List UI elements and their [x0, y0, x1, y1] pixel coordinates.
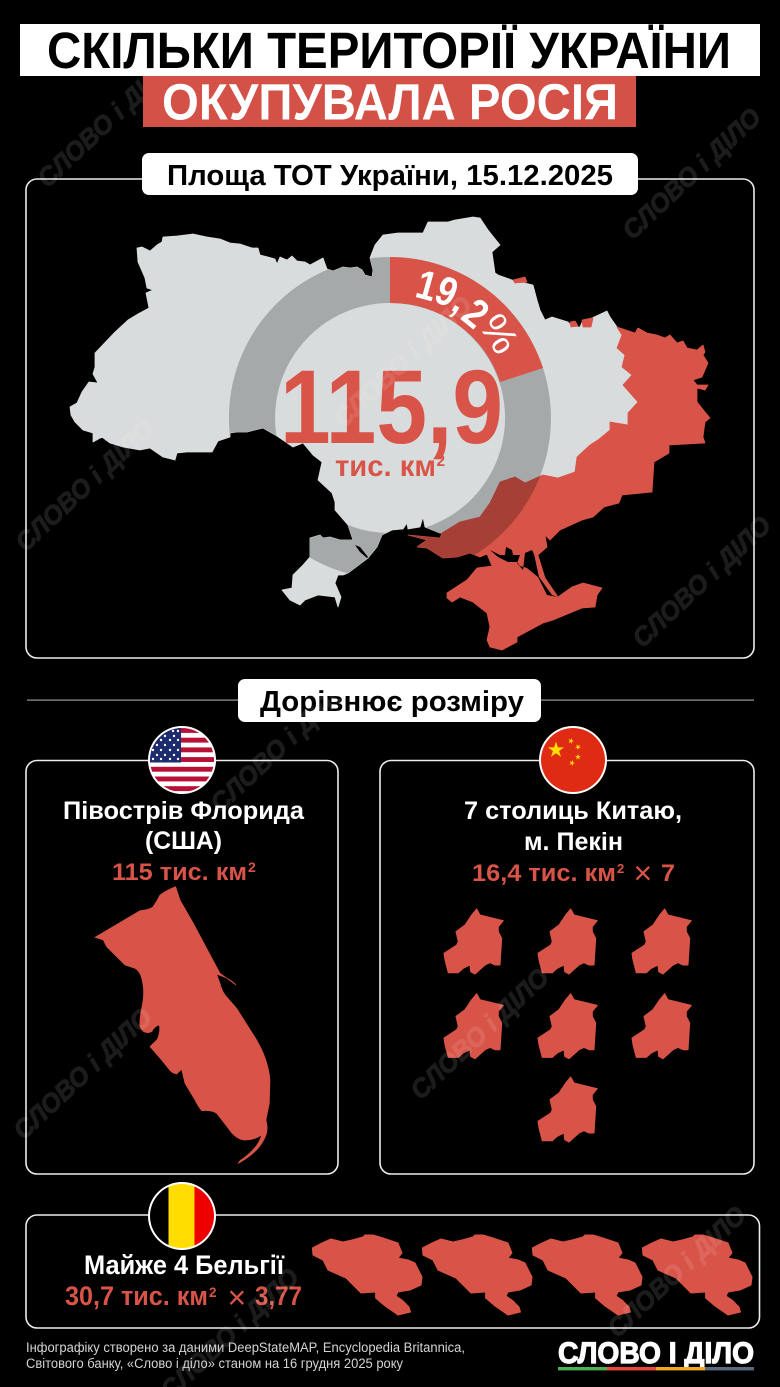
watermarks: СЛОВО і ДІЛО	[204, 675, 355, 818]
watermarks: СЛОВО і ДІЛО	[404, 962, 555, 1105]
watermarks: СЛОВО і ДІЛО	[31, 50, 182, 193]
value: 16.4 thousand sq km times 7: 7	[661, 860, 675, 887]
value: 16.4 thousand sq km times 7: 16,4 тис. км	[472, 860, 616, 887]
value: 30.7 thousand sq km times 3.77	[65, 1280, 302, 1316]
segment label: 19,2%: %	[471, 306, 528, 362]
panel: Florida	[26, 726, 338, 1174]
logo: СЛОВО І ДІЛО	[558, 1336, 754, 1369]
source note: Інфографіку створено за даними DeepStateMAP, Encyclopedia Britannica,	[26, 1340, 465, 1355]
icon: USA flag	[148, 726, 216, 794]
shape: Florida	[95, 887, 270, 1163]
segment label: 19,2%: 1	[411, 262, 442, 311]
panel: Beijing	[380, 726, 754, 1174]
value: 16.4 thousand sq km times 7	[472, 855, 675, 891]
value: 16.4 thousand sq km times 7: ×	[634, 855, 652, 891]
heading: Florida peninsula: (США)	[145, 827, 222, 855]
value: 115 thousand sq km: 2	[248, 859, 256, 875]
segment label: 19,2%	[411, 262, 528, 362]
title	[20, 22, 760, 130]
watermarks: СЛОВО і ДІЛО	[7, 1002, 158, 1145]
watermarks: СЛОВО і ДІЛО	[601, 1200, 752, 1343]
shapes: seven Beijing silhouettes	[444, 909, 691, 1142]
shapes: four Belgium silhouettes	[312, 1235, 752, 1315]
panel frame	[26, 179, 754, 658]
icon: China flag	[539, 726, 607, 794]
watermarks: СЛОВО і ДІЛО	[327, 290, 478, 433]
value: 16.4 thousand sq km times 7: 2	[617, 861, 624, 876]
heading: 7 capitals of China: м. Пекін	[524, 828, 623, 856]
panel frame	[26, 760, 338, 1174]
segment label: 19,2%: 9	[428, 268, 464, 317]
source note	[26, 1340, 465, 1371]
watermarks: СЛОВО і ДІЛО	[9, 414, 160, 557]
panel: occupied territory of Ukraine	[26, 153, 754, 658]
value: 30.7 thousand sq km times 3.77: 2	[209, 1285, 217, 1300]
panel label	[142, 153, 638, 195]
title line 1: СКІЛЬКИ ТЕРИТОРІЇ УКРАЇНИ	[47, 22, 731, 79]
big number: 115,9: 115,9	[280, 349, 503, 466]
watermarks: СЛОВО і ДІЛО	[626, 510, 777, 653]
heading: almost 4 Belgiums: Майже 4 Бельгії	[84, 1250, 285, 1280]
map: free territory	[70, 217, 638, 607]
segment label: 19,2%: 2	[453, 291, 497, 338]
value: 30.7 thousand sq km times 3.77: ×	[228, 1280, 246, 1316]
source note: Світового банку, «Слово і діло» станом на 16 грудня 2025 року	[26, 1356, 403, 1371]
panel: Belgium	[26, 1182, 760, 1328]
panel frame	[380, 760, 754, 1174]
heading: Florida peninsula: Півострів Флорида	[63, 797, 305, 825]
section divider with label	[27, 679, 754, 722]
value: 30.7 thousand sq km times 3.77: 3,77	[255, 1281, 302, 1311]
heading: 7 capitals of China: 7 столиць Китаю,	[464, 797, 682, 825]
map of Ukraine	[70, 217, 710, 650]
heading: 7 capitals of China	[464, 797, 682, 856]
panel label: Площа ТОТ України, 15.12.2025	[167, 160, 613, 192]
value: 115 thousand sq km: 115 тис. км	[112, 859, 247, 886]
map: occupied territory	[408, 277, 710, 650]
value: 30.7 thousand sq km times 3.77: 30,7 тис. км	[65, 1281, 208, 1311]
title line 2: ОКУПУВАЛА РОСІЯ	[162, 74, 618, 130]
unit: thousand sq km: 2	[436, 453, 445, 470]
section divider with label: Дорівнює розміру	[260, 686, 524, 718]
panel frame	[26, 1215, 760, 1328]
unit: thousand sq km: тис. км	[335, 450, 436, 483]
segment label: 19,2%: ,	[445, 279, 477, 322]
sivash and estuaries	[355, 545, 558, 597]
heading: Florida peninsula	[63, 797, 305, 855]
watermarks: СЛОВО і ДІЛО	[616, 102, 767, 245]
icon: Belgium flag	[148, 1182, 216, 1250]
donut chart: 19.2 percent segment	[390, 257, 543, 382]
donut chart: gray ring	[229, 257, 551, 579]
